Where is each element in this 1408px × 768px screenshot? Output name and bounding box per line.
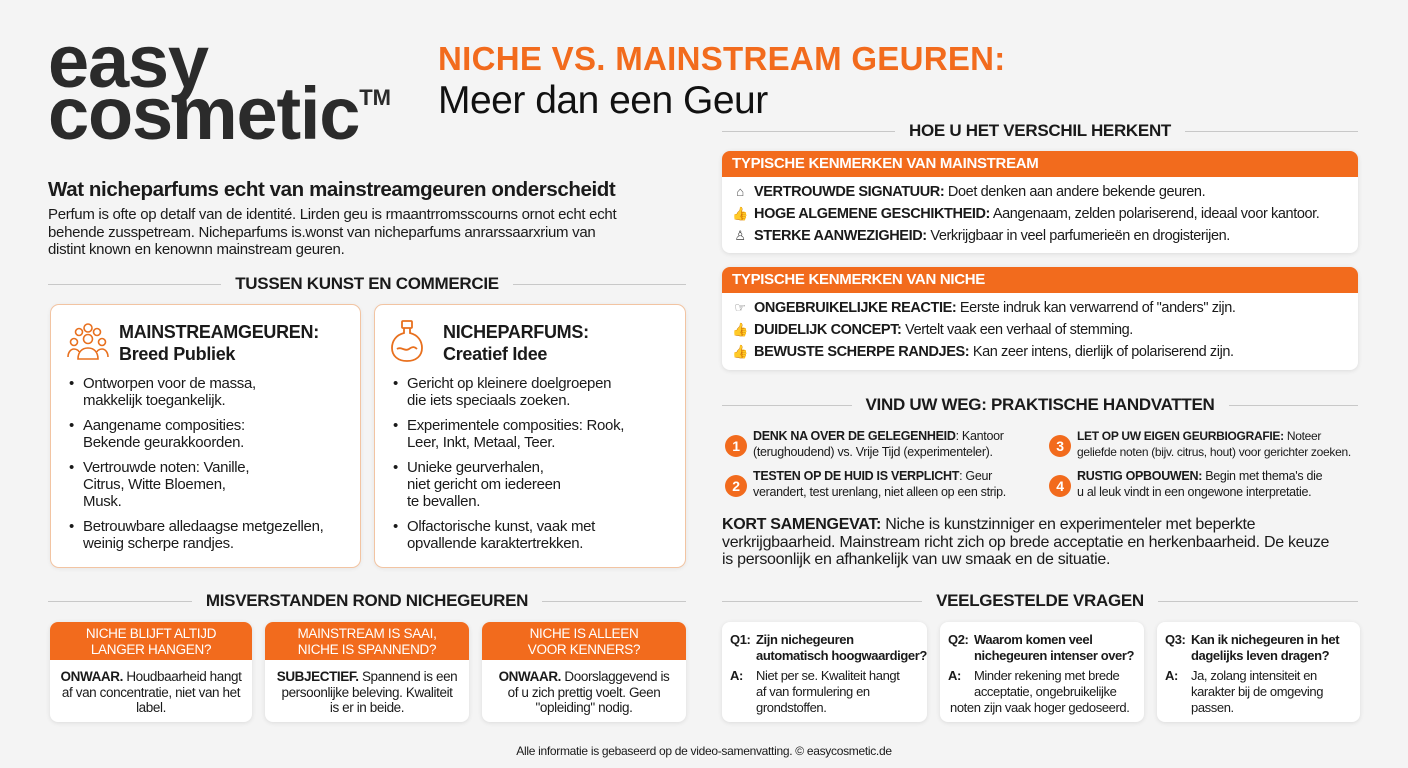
- text: 3: [1056, 438, 1064, 454]
- step 1: (terughoudend) vs. Vrije Tijd (experimenteler).: [753, 445, 993, 459]
- intro heading: Wat nicheparfums echt van mainstreamgeuren onderscheidt: [48, 178, 615, 201]
- myth card 3: VOOR KENNERS?: [528, 642, 640, 657]
- panel: kenmerken niche: ☞: [734, 300, 746, 315]
- faq 3: passen.: [1191, 700, 1234, 715]
- section heading: faq: VEELGESTELDE VRAGEN: [936, 591, 1144, 610]
- intro text: [48, 206, 617, 258]
- myth card 2: is er in beide.: [330, 700, 404, 715]
- panel: niche: [374, 304, 686, 568]
- panel: kenmerken mainstream: HOGE ALGEMENE GESCHIKTHEID: Aangenaam, zelden polariserend, ideaal voor kantoor.: [754, 206, 1319, 222]
- myth card 3: ONWAAR. Doorslaggevend is: [499, 669, 669, 684]
- panel: kenmerken niche: [722, 267, 1358, 370]
- panel: kenmerken niche: TYPISCHE KENMERKEN VAN NICHE: [732, 271, 985, 288]
- logo: easy: [48, 20, 208, 103]
- myth card 3: "opleiding" nodig.: [536, 700, 632, 715]
- panel: niche: niet gericht om iedereen: [407, 476, 561, 493]
- faq 1: af van formulering en: [756, 684, 870, 699]
- panel: mainstream: Ontworpen voor de massa,: [83, 375, 256, 392]
- panel: niche: te bevallen.: [407, 493, 480, 510]
- faq 3: Q3:: [1165, 632, 1185, 647]
- faq 3: karakter bij de omgeving: [1191, 684, 1323, 699]
- title: Meer dan een Geur: [438, 79, 768, 122]
- title: [438, 40, 1006, 122]
- step 4: [1049, 469, 1322, 499]
- faq 2: Waarom komen veel: [974, 632, 1092, 647]
- panel: niche: Creatief Idee: [443, 344, 547, 364]
- myth card 1: [50, 622, 252, 722]
- panel: kenmerken mainstream: 👍: [732, 206, 748, 221]
- faq 2: noten zijn vaak hoger gedoseerd.: [950, 700, 1129, 715]
- myth card 2: MAINSTREAM IS SAAI,: [297, 626, 437, 641]
- step 2: TESTEN OP DE HUID IS VERPLICHT: Geur: [753, 469, 992, 483]
- panel: kenmerken mainstream: VERTROUWDE SIGNATUUR: Doet denken aan andere bekende geuren.: [754, 184, 1205, 200]
- myth card 2: SUBJECTIEF. Spannend is een: [277, 669, 457, 684]
- panel: kenmerken niche: DUIDELIJK CONCEPT: Vertelt vaak een verhaal of stemming.: [754, 322, 1133, 338]
- panel: niche: Leer, Inkt, Metaal, Teer.: [407, 434, 555, 451]
- panel: mainstream: Musk.: [83, 493, 122, 510]
- footer: Alle informatie is gebaseerd op de video-samenvatting. © easycosmetic.de: [516, 744, 892, 758]
- faq 1: Q1:: [730, 632, 750, 647]
- myth card 3: of u zich prettig voelt. Geen: [508, 684, 660, 700]
- text: 1: [732, 438, 740, 454]
- panel: kenmerken niche: BEWUSTE SCHERPE RANDJES: Kan zeer intens, dierlijk of polariserend zijn.: [754, 344, 1234, 360]
- faq 1: automatisch hoogwaardiger?: [756, 648, 927, 663]
- text: 2: [732, 478, 740, 494]
- faq 3: [1157, 622, 1360, 722]
- faq 3: Kan ik nichegeuren in het: [1191, 632, 1339, 647]
- panel: niche: Olfactorische kunst, vaak met: [407, 518, 595, 535]
- panel: kenmerken mainstream: ⌂: [736, 184, 744, 199]
- summary: [722, 516, 1329, 568]
- intro text: behende zusspetream. Nicheparfums is.wonst van nicheparfums anrarssaarxrium van: [48, 224, 595, 240]
- step 4: u al leuk vindt in een ongewone interpretatie.: [1077, 485, 1311, 499]
- logo: cosmeticTM: [48, 72, 391, 155]
- panel: niche: NICHEPARFUMS:: [443, 322, 589, 342]
- section heading: misverstanden: MISVERSTANDEN ROND NICHEGEUREN: [206, 591, 528, 610]
- panel: mainstream: Betrouwbare alledaagse metgezellen,: [83, 518, 324, 535]
- summary: verkrijgbaarheid. Mainstream richt zich op brede acceptatie en herkenbaarheid. De keuze: [722, 534, 1329, 550]
- panel: niche: opvallende karaktertrekken.: [407, 535, 583, 552]
- faq 1: Niet per se. Kwaliteit hangt: [756, 668, 899, 683]
- panel: kenmerken niche: 👍: [732, 344, 748, 359]
- panel: niche: die iets speciaals zoeken.: [407, 392, 570, 409]
- faq 1: Zijn nichegeuren: [756, 632, 854, 647]
- step 3: geliefde noten (bijv. citrus, hout) voor gerichter zoeken.: [1077, 445, 1351, 459]
- panel: mainstream: Bekende geurakkoorden.: [83, 434, 244, 451]
- faq 1: A:: [730, 668, 743, 683]
- panel: niche: Experimentele composities: Rook,: [407, 417, 624, 434]
- panel: niche: Gericht op kleinere doelgroepen: [407, 375, 611, 392]
- panel: mainstream: [50, 304, 361, 568]
- faq 3: dagelijks leven dragen?: [1191, 648, 1329, 663]
- faq 3: Ja, zolang intensiteit en: [1191, 668, 1317, 683]
- myth card 1: af van concentratie, niet van het: [62, 684, 240, 700]
- myth card 2: NICHE IS SPANNEND?: [298, 642, 436, 657]
- faq 1: [722, 622, 927, 722]
- step 2: verandert, test urenlang, niet alleen op een strip.: [753, 485, 1006, 499]
- step 1: DENK NA OVER DE GELEGENHEID: Kantoor: [753, 429, 1004, 443]
- panel: mainstream: makkelijk toegankelijk.: [83, 392, 225, 409]
- faq 2: Q2:: [948, 632, 968, 647]
- step 2: [725, 469, 1006, 499]
- panel: kenmerken mainstream: [722, 151, 1358, 253]
- panel: mainstream: Aangename composities:: [83, 417, 245, 434]
- panel: kenmerken mainstream: TYPISCHE KENMERKEN VAN MAINSTREAM: [732, 155, 1039, 172]
- section heading: hoe u het verschil: HOE U HET VERSCHIL HERKENT: [909, 121, 1171, 140]
- panel: mainstream: weinig scherpe randjes.: [83, 535, 234, 552]
- panel: mainstream: Citrus, Witte Bloemen,: [83, 476, 226, 493]
- step 3: LET OP UW EIGEN GEURBIOGRAFIE: Noteer: [1077, 429, 1321, 443]
- myth card 3: [482, 622, 686, 722]
- myth card 1: NICHE BLIJFT ALTIJD: [86, 626, 216, 641]
- faq 1: grondstoffen.: [756, 700, 826, 715]
- myth card 1: LANGER HANGEN?: [91, 642, 211, 657]
- title: NICHE VS. MAINSTREAM GEUREN:: [438, 40, 1006, 77]
- section heading: tussen kunst: TUSSEN KUNST EN COMMERCIE: [235, 274, 499, 293]
- icon: people: [67, 323, 109, 360]
- myth card 2: [265, 622, 469, 722]
- myth card 1: ONWAAR. Houdbaarheid hangt: [61, 669, 241, 684]
- faq 2: Minder rekening met brede: [974, 668, 1119, 683]
- summary: is persoonlijk en afhankelijk van uw smaak en de situatie.: [722, 551, 1110, 568]
- intro text: distint known en kenownn mainstream geuren.: [48, 241, 344, 258]
- step 3: [1049, 429, 1351, 459]
- intro text: Perfum is ofte op detalf van de identité. Lirden geu is rmaantrromsscourns ornot echt echt: [48, 206, 616, 223]
- myth card 1: label.: [136, 700, 166, 715]
- panel: kenmerken niche: ONGEBRUIKELIJKE REACTIE: Eerste indruk kan verwarrend of "anders" zijn.: [754, 300, 1236, 316]
- panel: mainstream: Vertrouwde noten: Vanille,: [83, 459, 249, 476]
- panel: mainstream: Breed Publiek: [119, 344, 235, 364]
- panel: mainstream: MAINSTREAMGEUREN:: [119, 322, 319, 342]
- panel: niche: Unieke geurverhalen,: [407, 459, 544, 476]
- faq 2: acceptatie, ongebruikelijke: [974, 684, 1116, 699]
- step 4: RUSTIG OPBOUWEN: Begin met thema's die: [1077, 469, 1322, 483]
- myth card 2: persoonlijke beleving. Kwaliteit: [281, 684, 453, 700]
- faq 3: A:: [1165, 668, 1178, 683]
- faq 2: nichegeuren intenser over?: [974, 648, 1134, 663]
- logo: [48, 20, 391, 155]
- faq 2: A:: [948, 668, 961, 683]
- text: 4: [1056, 478, 1064, 494]
- section heading: vind uw weg: VIND UW WEG: PRAKTISCHE HANDVATTEN: [866, 395, 1214, 414]
- icon: perfume bottle: [391, 320, 423, 362]
- summary: KORT SAMENGEVAT: Niche is kunstzinniger en experimenteler met beperkte: [722, 516, 1255, 533]
- panel: kenmerken mainstream: ♙: [734, 228, 746, 243]
- step 1: [725, 429, 1004, 459]
- faq 2: [940, 622, 1144, 722]
- panel: kenmerken niche: 👍: [732, 322, 748, 337]
- panel: kenmerken mainstream: STERKE AANWEZIGHEID: Verkrijgbaar in veel parfumerieën en drogisterijen.: [754, 228, 1230, 244]
- myth card 3: NICHE IS ALLEEN: [530, 626, 638, 641]
